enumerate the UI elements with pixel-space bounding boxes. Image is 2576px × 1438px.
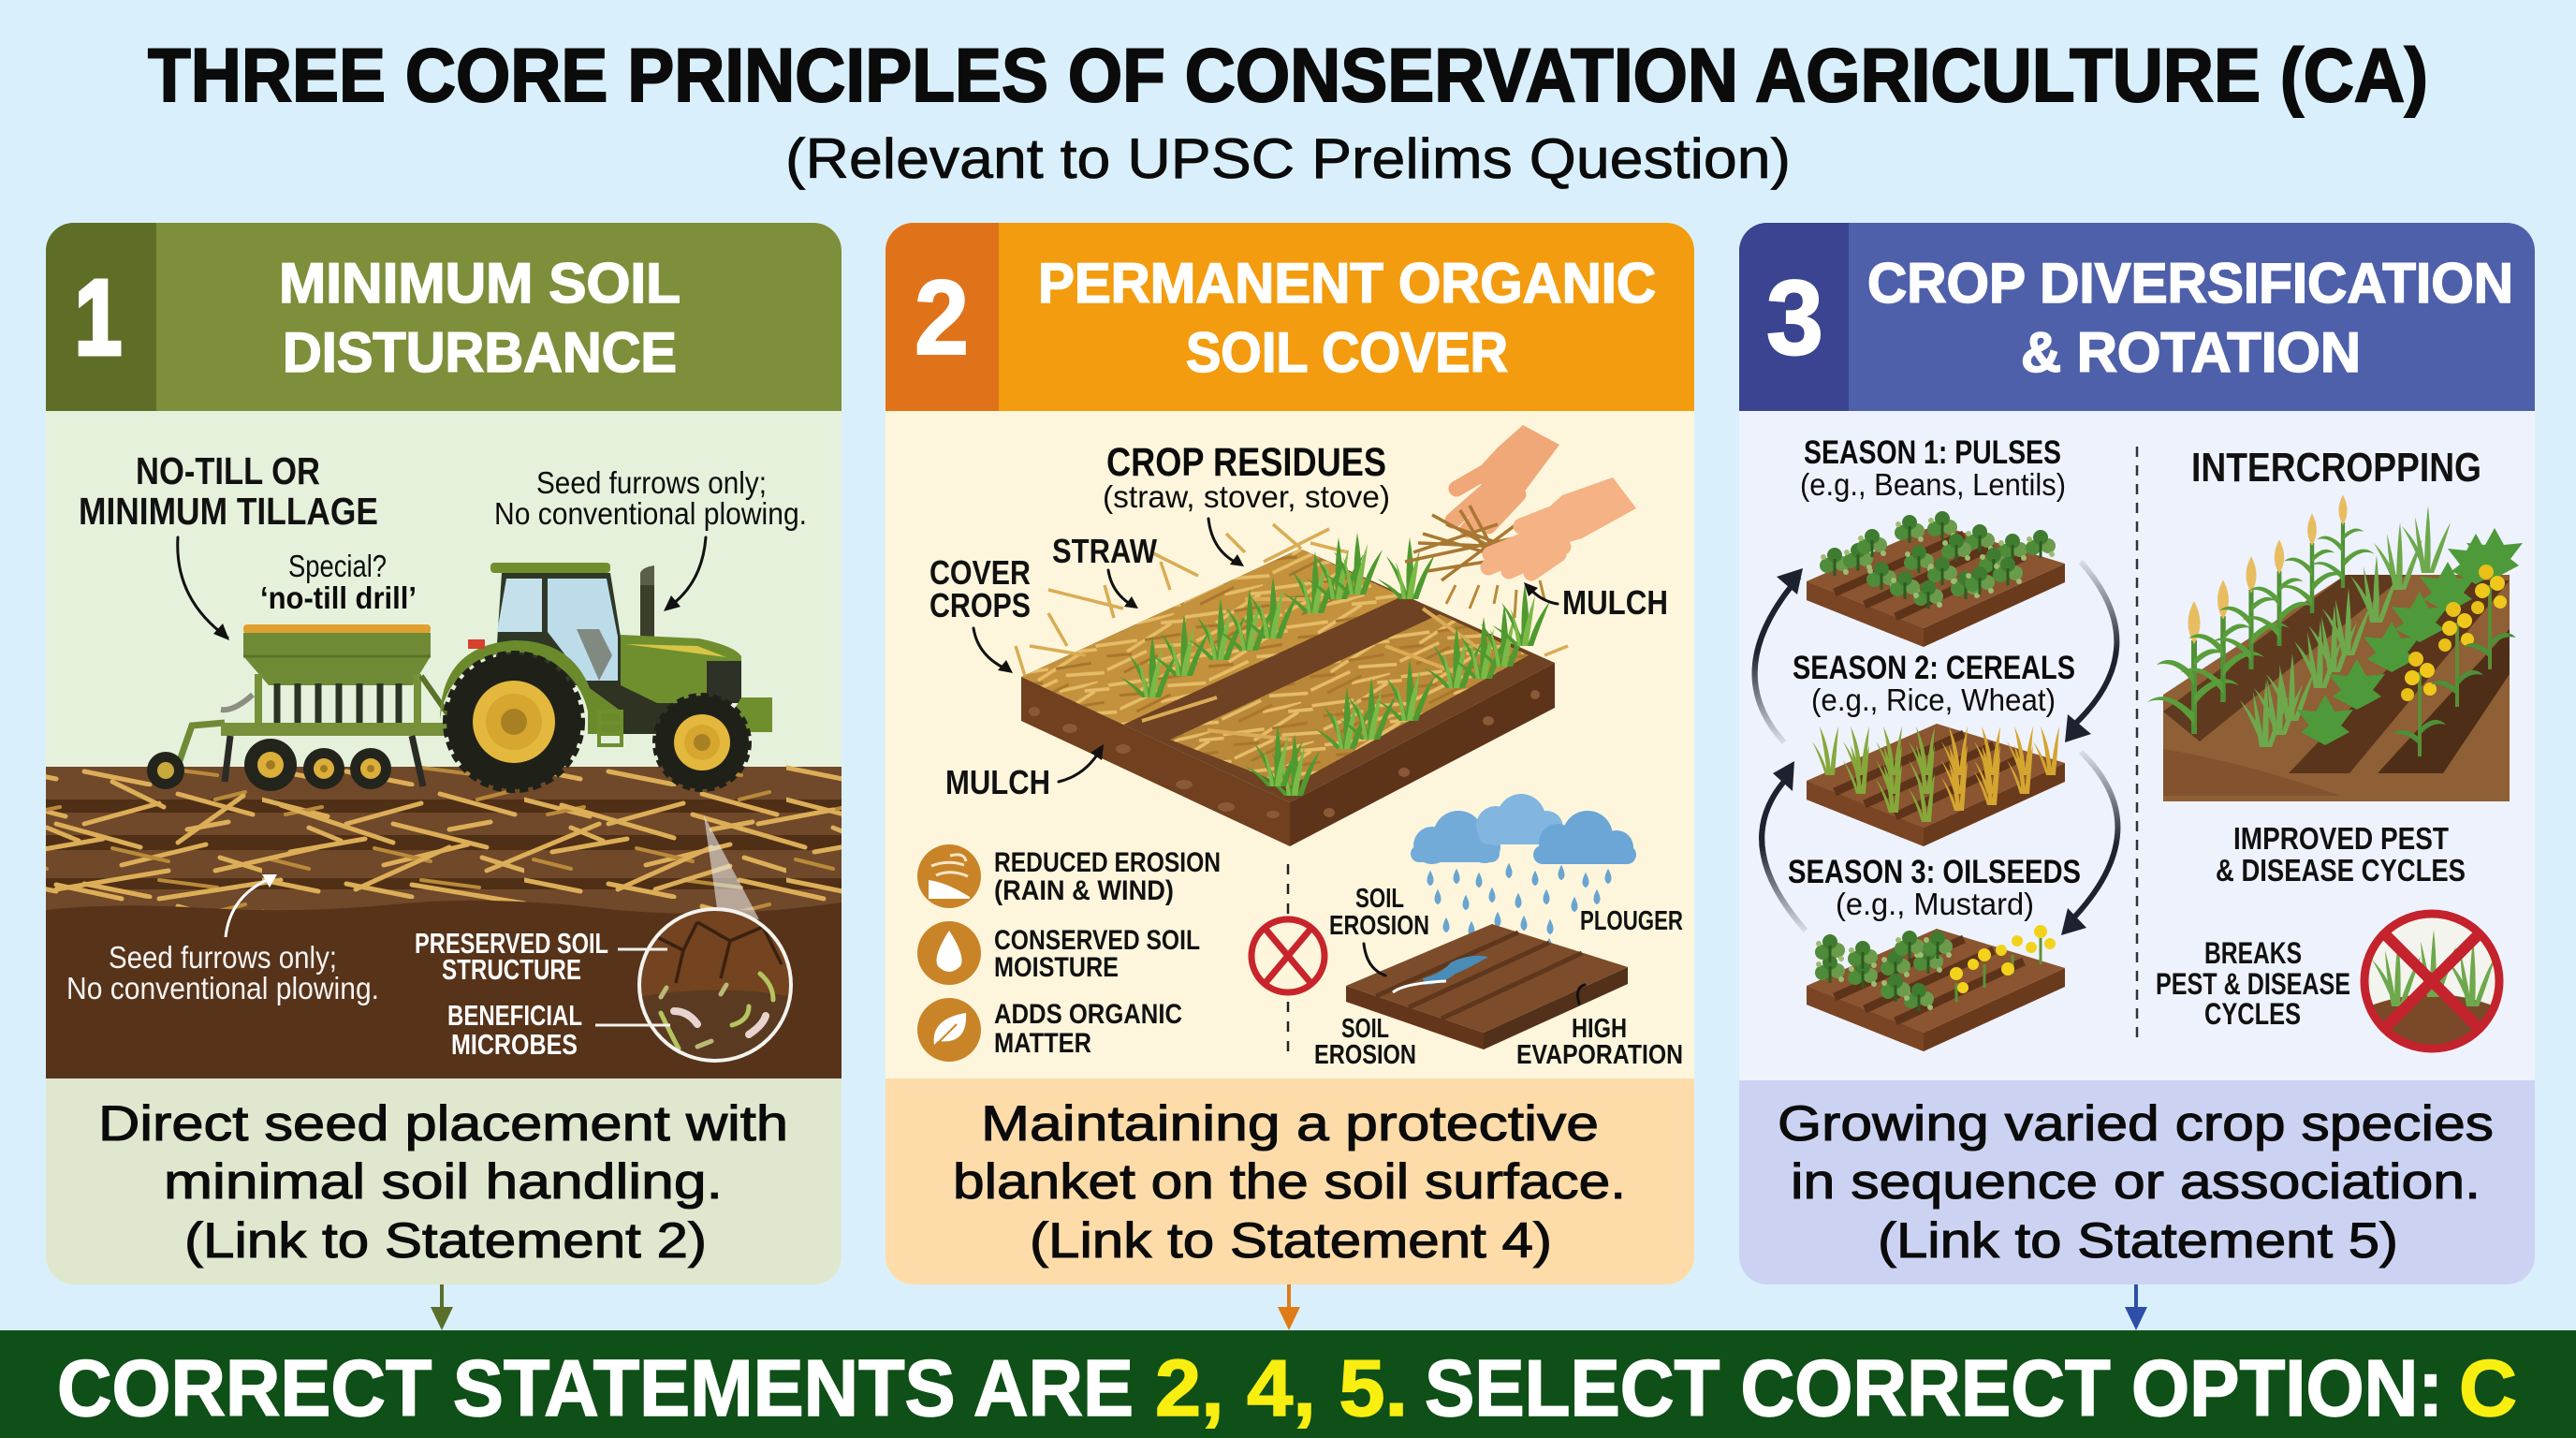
label: preserved soil structure: STRUCTURE [442, 953, 581, 986]
panel 1 header [46, 223, 842, 411]
panel 3 caption [1739, 1080, 2535, 1284]
text: improved pest and disease cycles: IMPROVED PEST [2233, 821, 2449, 856]
label: straw: STRAW [1052, 532, 1157, 570]
label: high evaporation: HIGH [1572, 1014, 1627, 1044]
ploughed soil block [1346, 924, 1628, 1049]
arrow: panel 1 to answer [431, 1284, 453, 1330]
panel: minimum soil disturbance [46, 223, 842, 1284]
icon: prohibited red cross [1251, 919, 1325, 992]
panel 3 header [1739, 223, 2535, 411]
no-till drill [147, 624, 449, 791]
season 3 plot [1807, 925, 2065, 1051]
label: season 1: (e.g., Beans, Lentils) [1800, 467, 2066, 502]
panel 3 caption: in sequence or association. [1791, 1154, 2481, 1210]
arrow: to drill [178, 537, 229, 640]
panel 1 caption: Direct seed placement with [98, 1096, 788, 1152]
panel 3 heading: CROP DIVERSIFICATION [1867, 252, 2513, 315]
intercropping scene [2147, 495, 2523, 801]
label: beneficial microbes: BENEFICIAL [447, 999, 582, 1032]
icon: hands scattering mulch [1405, 425, 1636, 618]
season 2 plot [1807, 724, 2065, 846]
label: preserved soil structure: PRESERVED SOIL [415, 927, 608, 960]
answer text: SELECT CORRECT OPTION: [1425, 1344, 2443, 1433]
label: seed furrows top: No conventional plowing. [494, 496, 807, 531]
season 1 plot [1807, 511, 2065, 647]
panel 3 heading: & ROTATION [2021, 321, 2361, 384]
arrow: to tractor [664, 537, 706, 611]
label: soil erosion bottom: SOIL [1341, 1014, 1389, 1044]
label: season 1: SEASON 1: PULSES [1804, 434, 2061, 471]
panel: crop diversification and rotation [1739, 223, 2535, 1284]
panel 2 header [886, 223, 1694, 411]
label: beneficial microbes: MICROBES [451, 1028, 578, 1061]
panel 3 caption: (Link to Statement 5) [1878, 1213, 2398, 1269]
panel 1 caption: minimal soil handling. [164, 1154, 723, 1210]
answer text: 2, 4, 5. [1155, 1344, 1408, 1433]
panel 2 heading: SOIL COVER [1186, 321, 1508, 384]
text: improved pest and disease cycles: & DISEASE CYCLES [2216, 853, 2466, 888]
icon: rain clouds [1411, 794, 1636, 952]
answer text: CORRECT STATEMENTS ARE [57, 1344, 1134, 1433]
label: season 3: SEASON 3: OILSEEDS [1788, 854, 2081, 890]
soil and straw scene [46, 760, 842, 1078]
subtitle: (Relevant to UPSC Prelims Question) [785, 127, 1791, 190]
panel 1 heading: MINIMUM SOIL [279, 252, 681, 315]
icon: no pests sign [2364, 914, 2499, 1049]
panel 3 caption: Growing varied crop species [1778, 1096, 2494, 1152]
arrow: panel 3 to answer [2125, 1284, 2147, 1330]
panel: permanent organic soil cover [886, 223, 1694, 1284]
label: cover crops: CROPS [929, 586, 1031, 624]
label: mulch left: MULCH [945, 763, 1050, 801]
label: no-till or minimum tillage: NO-TILL OR [136, 449, 320, 492]
text: adds organic matter: ADDS ORGANIC [994, 999, 1182, 1030]
text: breaks pest and disease cycles: BREAKS [2204, 936, 2302, 970]
label: special no-till drill: ‘no-till drill’ [260, 580, 417, 615]
label: soil erosion top: EROSION [1329, 911, 1429, 941]
label: seed furrows top: Seed furrows only; [536, 465, 767, 500]
label: crop residues: CROP RESIDUES [1106, 440, 1386, 485]
arrows: ploughed block [1364, 944, 1585, 1004]
label: crop residues: (straw, stover, stove) [1103, 479, 1390, 514]
label: mulch right: MULCH [1562, 583, 1668, 622]
tractor [440, 563, 772, 789]
label: high evaporation: EVAPORATION [1516, 1040, 1683, 1070]
icon: reduced erosion [917, 844, 981, 908]
panel 1 caption [46, 1078, 842, 1284]
label: seed furrows in soil: Seed furrows only; [109, 940, 337, 975]
panel 2 caption: Maintaining a protective [981, 1096, 1599, 1152]
text: adds organic matter: MATTER [994, 1028, 1091, 1059]
label: soil erosion bottom: EROSION [1314, 1040, 1416, 1070]
label: season 3: (e.g., Mustard) [1836, 887, 2034, 921]
arrows: block callouts [973, 519, 1558, 782]
arrow: white furrow [226, 874, 277, 937]
answer banner [0, 1330, 2576, 1438]
cycle arrows [1755, 562, 2117, 935]
text: reduced erosion: (RAIN & WIND) [994, 875, 1174, 906]
magnifier wedge [704, 815, 759, 919]
soil block with residues [1016, 524, 1568, 846]
icon: soil moisture drop [917, 921, 981, 985]
label: cover crops: COVER [929, 553, 1031, 592]
text: reduced erosion: REDUCED EROSION [994, 847, 1221, 878]
label: seed furrows in soil: No conventional plowing. [66, 971, 379, 1005]
arrow: panel 2 to answer [1278, 1284, 1300, 1330]
answer text: C [2459, 1344, 2517, 1433]
label: special no-till drill: Special? [288, 549, 387, 583]
label: soil erosion top: SOIL [1355, 884, 1404, 914]
heading: intercropping: INTERCROPPING [2191, 445, 2481, 491]
text: breaks pest and disease cycles: CYCLES [2204, 997, 2301, 1031]
magnifier: soil structure and microbes [637, 908, 796, 1067]
panel 1 caption: (Link to Statement 2) [184, 1213, 707, 1269]
label: season 2: SEASON 2: CEREALS [1793, 650, 2075, 686]
panel 2 heading: PERMANENT ORGANIC [1038, 252, 1656, 315]
text: conserved soil moisture: CONSERVED SOIL [994, 925, 1200, 956]
panel 3 number: 3 [1766, 258, 1823, 376]
text: breaks pest and disease cycles: PEST & DISEASE [2156, 967, 2350, 1001]
label: season 2: (e.g., Rice, Wheat) [1811, 682, 2056, 717]
panel 1 number: 1 [75, 258, 122, 376]
icon: organic matter leaf [917, 998, 981, 1062]
label: plouger: PLOUGER [1580, 906, 1683, 936]
title: THREE CORE PRINCIPLES OF CONSERVATION AGRICULTURE (CA) [148, 34, 2428, 118]
panel 2 caption: blanket on the soil surface. [953, 1154, 1626, 1210]
label: no-till or minimum tillage: MINIMUM TILLAGE [79, 490, 378, 533]
panel 2 caption: (Link to Statement 4) [1030, 1213, 1552, 1269]
panel 2 caption [886, 1078, 1694, 1284]
panel 2 number: 2 [915, 258, 969, 376]
panel 1 heading: DISTURBANCE [283, 321, 677, 384]
text: conserved soil moisture: MOISTURE [994, 952, 1119, 983]
